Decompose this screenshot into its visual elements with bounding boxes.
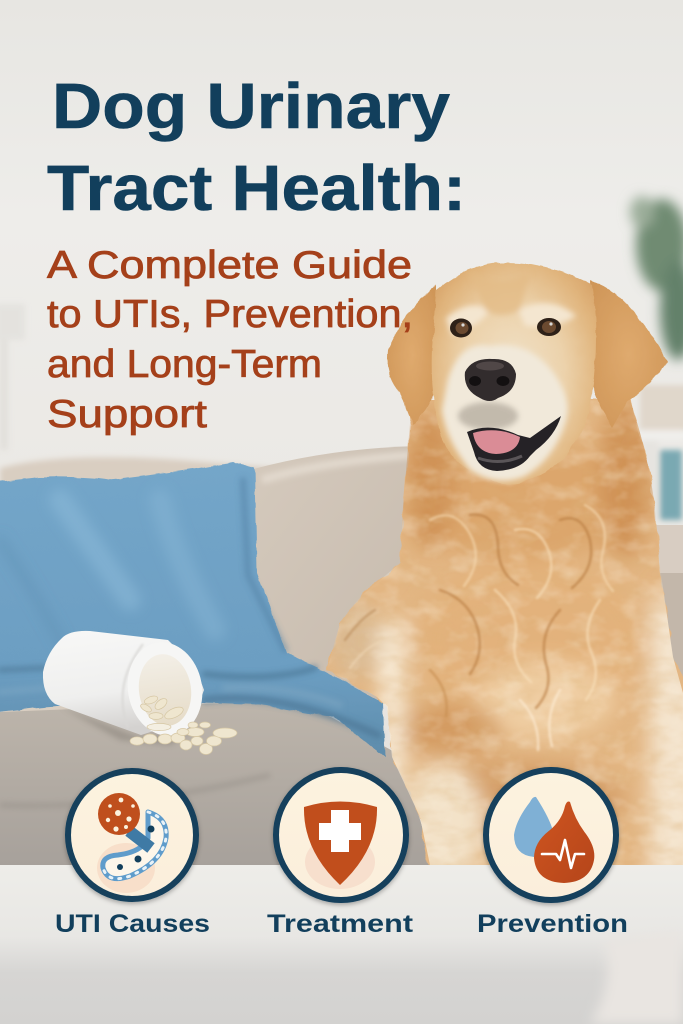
left eye: [450, 318, 472, 338]
title: Dog Urinary: [52, 70, 450, 142]
bottle body: [43, 631, 204, 735]
label: Prevention: Prevention: [477, 910, 628, 938]
potted plant: [630, 196, 683, 360]
left ear: [388, 285, 436, 425]
nose: [465, 359, 516, 401]
subtitle: and Long-Term: [47, 343, 322, 386]
icon: prevention drops: [486, 770, 616, 900]
bottle mouth: [120, 636, 210, 742]
fur texture dark: [376, 432, 683, 865]
label: Treatment: Treatment: [267, 910, 414, 938]
title: [47, 70, 466, 224]
bottom band: [0, 865, 683, 1024]
capsules: [130, 694, 237, 754]
blue blanket: [0, 462, 385, 757]
fur strands: [345, 505, 613, 750]
background shelf left: [0, 304, 25, 450]
dog silhouette: [327, 400, 683, 870]
label: UTI Causes: UTI Causes: [55, 910, 210, 938]
icon: UTI causes: [68, 771, 196, 899]
subtitle: A Complete Guide: [47, 244, 412, 287]
right ear: [590, 280, 667, 428]
golden retriever: [320, 263, 683, 885]
title: Tract Health:: [47, 152, 466, 224]
grey shade under nose: [458, 402, 518, 430]
open mouth: [467, 416, 561, 471]
head: [432, 263, 596, 484]
pill bottle with spilled capsules: [43, 631, 237, 754]
subtitle: Support: [47, 393, 207, 436]
right eye: [537, 318, 561, 336]
shaded fur regions: [320, 400, 683, 885]
subtitle: to UTIs, Prevention,: [47, 293, 413, 336]
sofa: [0, 446, 683, 865]
forehead highlights: [446, 272, 576, 336]
subtitle: [47, 244, 413, 436]
fur texture light: [320, 400, 683, 870]
icon: treatment shield: [276, 770, 406, 900]
muzzle: [442, 345, 568, 481]
background shelf right: [636, 385, 683, 525]
